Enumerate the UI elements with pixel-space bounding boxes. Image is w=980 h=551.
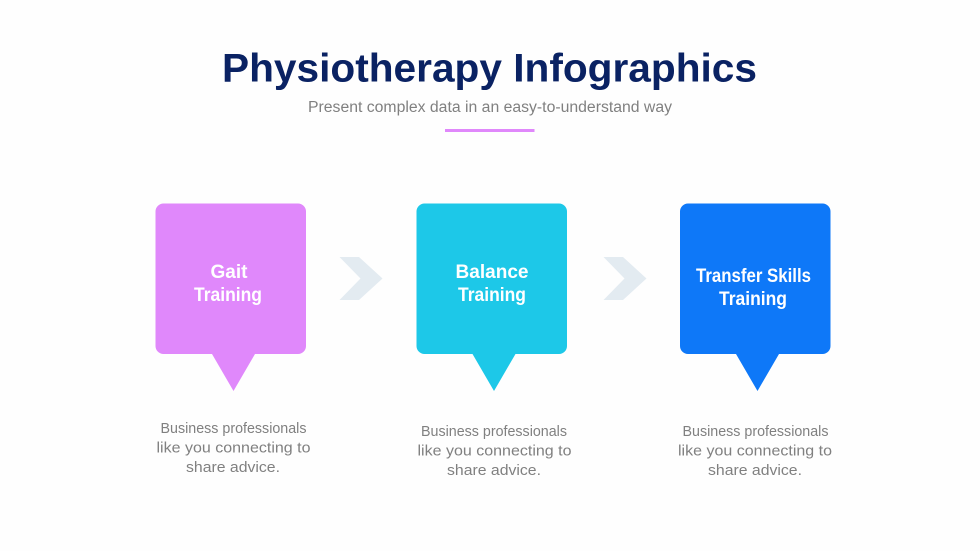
speech bubble: transfer skills training	[680, 204, 830, 391]
description: balance training: like you connecting to	[418, 444, 572, 460]
description: transfer skills training: share advice.	[708, 463, 802, 479]
panel: balance training	[416, 204, 572, 479]
panel: gait training	[156, 204, 310, 476]
speech bubble: balance training	[416, 204, 567, 391]
description: balance training: Business professionals	[421, 424, 567, 440]
heading: gait training: Gait	[211, 262, 248, 283]
description: balance training: share advice.	[447, 463, 541, 479]
heading: balance training: Balance	[456, 262, 528, 283]
panel: transfer skills training	[678, 204, 832, 479]
heading: balance training: Training	[458, 285, 526, 306]
speech bubble: gait training	[156, 204, 306, 391]
description: transfer skills training: Business professionals	[682, 424, 828, 440]
description: transfer skills training: like you connecting to	[678, 444, 832, 460]
arrow: balance to transfer skills	[604, 257, 646, 300]
arrow: gait to balance	[340, 257, 382, 300]
description: gait training: share advice.	[186, 460, 280, 476]
description: gait training: like you connecting to	[156, 440, 310, 456]
title accent bar	[445, 129, 534, 132]
title: Physiotherapy Infographics	[222, 46, 757, 90]
description: gait training: Business professionals	[160, 421, 306, 437]
subtitle: Present complex data in an easy-to-understand way	[308, 99, 672, 116]
heading: transfer skills training: Transfer Skills	[696, 266, 811, 287]
heading: gait training: Training	[194, 285, 262, 306]
heading: transfer skills training: Training	[719, 289, 787, 310]
